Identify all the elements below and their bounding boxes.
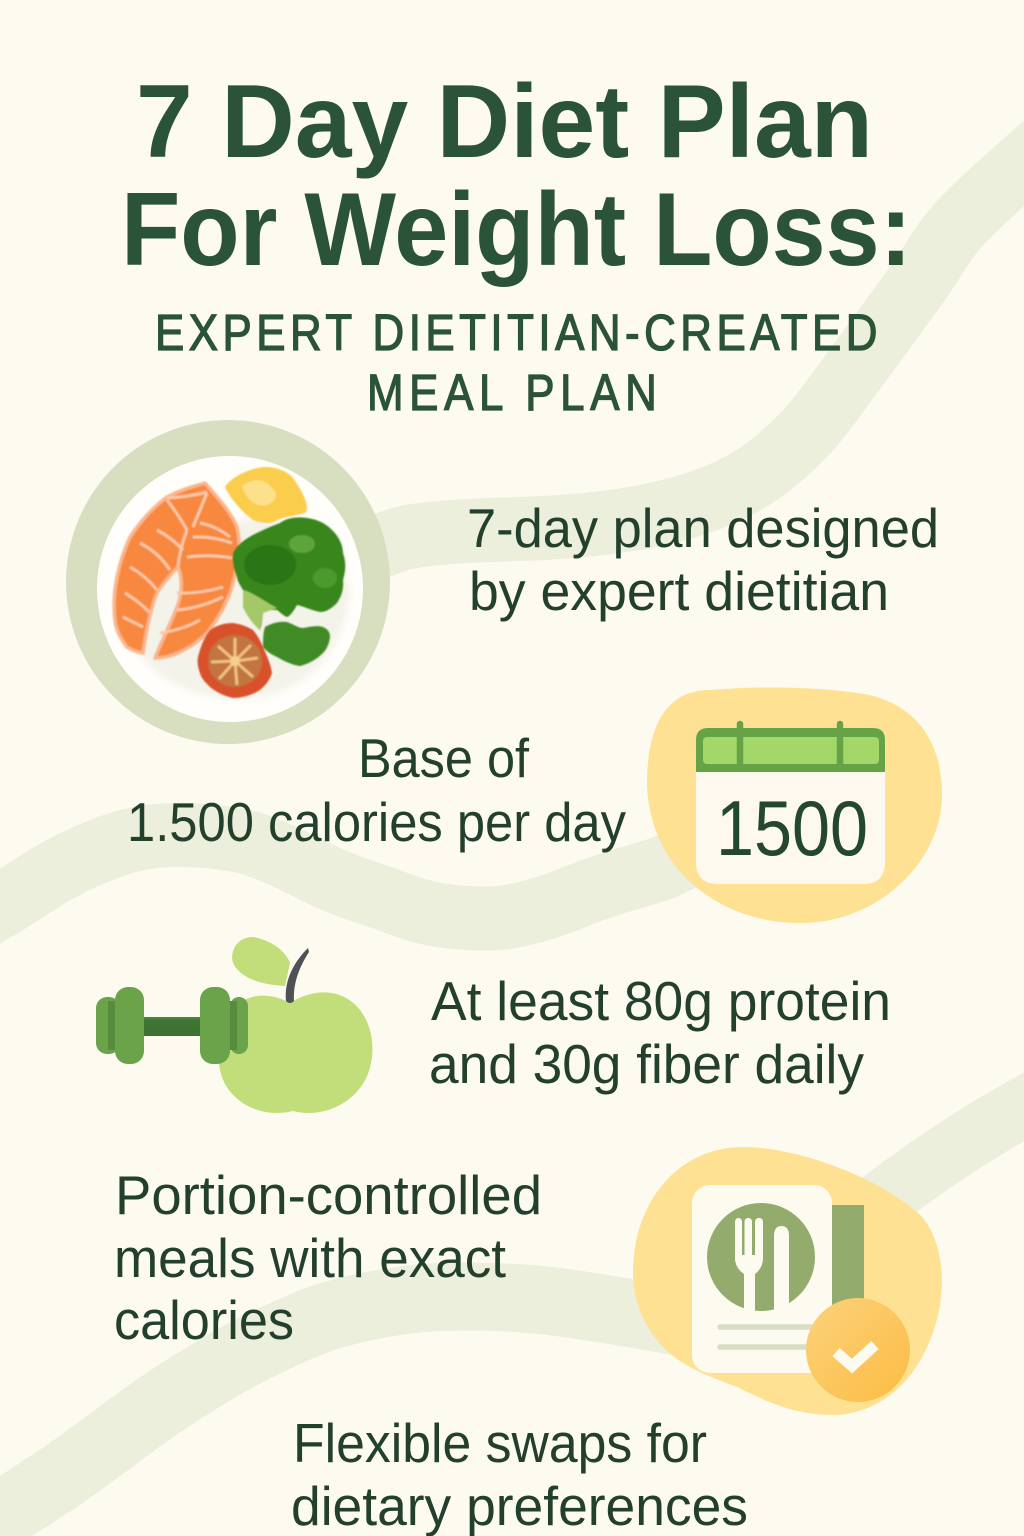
icon: calendar 1500: 1500 xyxy=(716,784,868,872)
text: portion-controlled: calories xyxy=(114,1289,294,1351)
subtitle: MEAL PLAN xyxy=(367,365,657,422)
text: base calories xyxy=(127,727,626,853)
title: For Weight Loss: xyxy=(121,172,912,288)
subtitle xyxy=(155,305,877,422)
text: protein and fiber: and 30g fiber daily xyxy=(429,1033,864,1095)
text: 7-day plan: 7-day plan designed xyxy=(467,497,939,559)
text: 7-day plan xyxy=(467,497,939,622)
icon: calendar 1500 xyxy=(647,688,942,923)
text: portion-controlled: Portion-controlled xyxy=(115,1164,542,1226)
title xyxy=(121,64,912,288)
leaf xyxy=(263,622,330,666)
icon: dumbbell and apple xyxy=(96,937,372,1113)
text: portion-controlled xyxy=(114,1164,542,1351)
title: 7 Day Diet Plan xyxy=(136,64,873,180)
text: flexible swaps xyxy=(291,1412,748,1536)
text: flexible swaps: dietary preferences xyxy=(291,1475,748,1536)
text: 7-day plan: by expert dietitian xyxy=(469,560,889,622)
broccoli xyxy=(233,517,345,630)
salmon xyxy=(114,483,239,658)
text: protein and fiber: At least 80g protein xyxy=(431,970,891,1032)
text: portion-controlled: meals with exact xyxy=(114,1227,506,1289)
text: base calories: Base of xyxy=(358,727,530,789)
text: flexible swaps: Flexible swaps for xyxy=(293,1412,707,1474)
icon: plate with salmon, lemon, broccoli, tomato xyxy=(66,420,390,744)
subtitle: EXPERT DIETITIAN-CREATED xyxy=(155,305,877,362)
icon: menu card with checkmark xyxy=(633,1147,942,1415)
lemon xyxy=(225,467,307,523)
tomato xyxy=(198,623,272,698)
text: base calories: 1.500 calories per day xyxy=(127,791,626,853)
text: protein and fiber xyxy=(429,970,891,1095)
